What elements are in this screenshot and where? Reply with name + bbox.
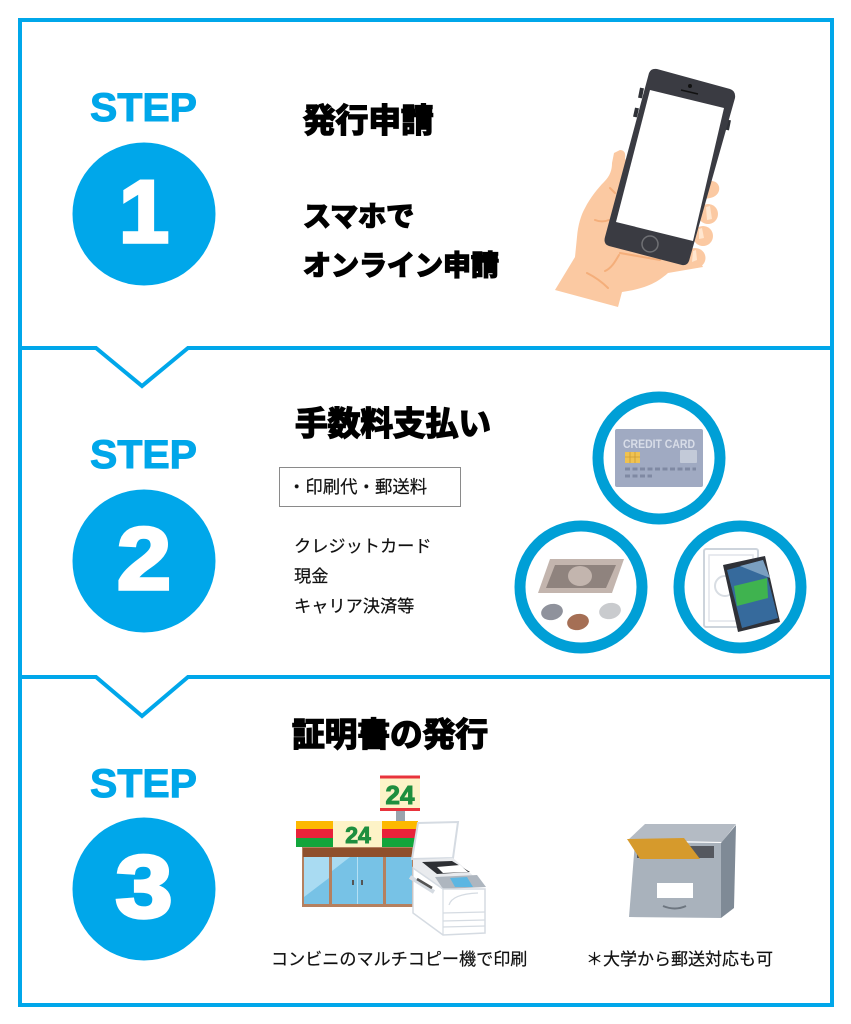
fee box bbox=[280, 468, 460, 506]
icon: convenience store: 24 bbox=[386, 780, 415, 810]
icon: smartphone payment in circle bbox=[679, 526, 801, 648]
step 1 number badge bbox=[72, 142, 216, 286]
step 1 description: スマホで bbox=[303, 201, 414, 232]
step 3 number badge bbox=[72, 818, 216, 960]
step 1 heading: 発行申請 bbox=[303, 102, 434, 139]
icon: multifunction copier bbox=[410, 822, 486, 935]
step 3 label: STEP bbox=[90, 762, 197, 806]
divider with chevron: step 2 to 3 bbox=[20, 677, 832, 716]
step 1 label: STEP bbox=[90, 86, 197, 130]
icon: convenience store bbox=[296, 776, 420, 907]
step 3 heading: 証明書の発行 bbox=[292, 716, 488, 753]
step 3 number badge: 3 bbox=[116, 837, 172, 936]
payment methods: 現金 bbox=[294, 566, 328, 586]
caption: postal option: ＊大学から郵送対応も可 bbox=[586, 950, 773, 969]
icon: mailbox with envelope bbox=[627, 824, 736, 918]
step 1 description: オンライン申請 bbox=[303, 250, 499, 281]
payment methods bbox=[294, 536, 432, 616]
payment methods: キャリア決済等 bbox=[294, 596, 414, 616]
step 2 number badge bbox=[72, 490, 216, 632]
icon: credit card in circle bbox=[598, 397, 720, 519]
icon: convenience store: 24 bbox=[345, 822, 371, 848]
step 1 description bbox=[303, 201, 499, 281]
step 2 label: STEP bbox=[90, 433, 197, 477]
panel: step 2 bbox=[72, 397, 801, 648]
step 2 number badge: 2 bbox=[117, 509, 171, 608]
caption: convenience store printing: コンビニのマルチコピー機で印刷 bbox=[271, 950, 527, 969]
icon: cash and coins in circle bbox=[520, 526, 642, 648]
step 2 heading: 手数料支払い bbox=[295, 405, 491, 442]
fee box: ・印刷代・郵送料 bbox=[288, 477, 427, 497]
panel: step 1 bbox=[72, 69, 735, 307]
icon: hand holding smartphone bbox=[555, 69, 735, 307]
divider with chevron: step 1 to 2 bbox=[20, 348, 832, 386]
step 1 number badge: 1 bbox=[119, 162, 169, 261]
panel: step 3 bbox=[72, 716, 773, 969]
icon: credit card in circle: CREDIT CARD bbox=[623, 437, 695, 451]
payment methods: クレジットカード bbox=[294, 536, 432, 556]
